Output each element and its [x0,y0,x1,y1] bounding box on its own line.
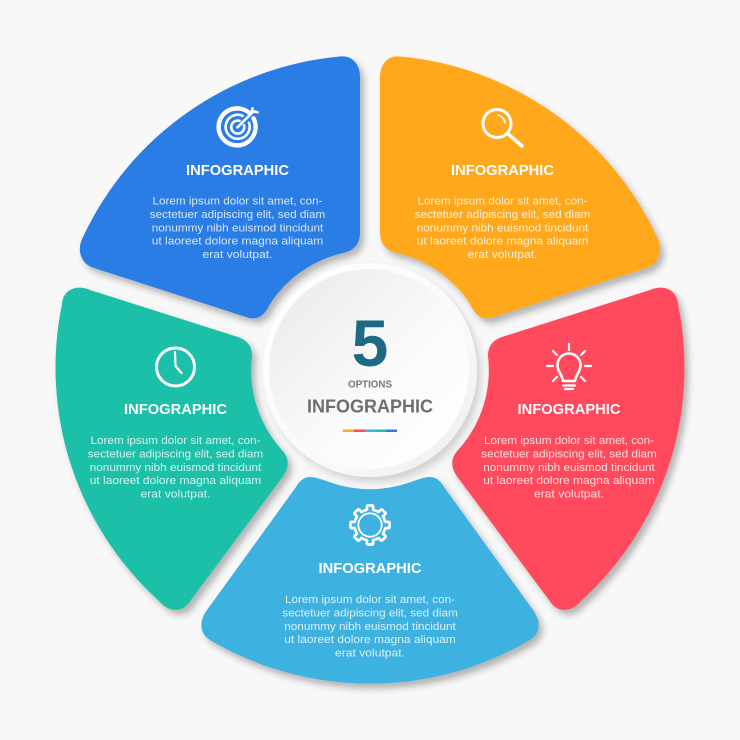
orange panel shape [380,56,660,318]
heading: INFOGRAPHIC [318,560,422,577]
panel: blue target [80,56,360,318]
body text: nonummy nibh euismod tincidunt [90,462,261,474]
body text: Lorem ipsum dolor sit amet, con- [152,196,323,208]
body text: ut laoreet dolore magna aliquam [284,634,456,646]
outer ring [263,263,477,477]
body text [150,196,325,261]
body text: nonummy nibh euismod tincidunt [152,222,323,234]
body text: nonummy nibh euismod tincidunt [483,462,655,474]
center circle [263,263,477,477]
center heading: INFOGRAPHIC [307,397,433,417]
red panel shape [452,288,684,610]
body text: nonummy nibh euismod tincidunt [284,621,456,633]
panel: orange magnifier [380,56,660,318]
color bar [343,430,397,432]
body text: Lorem ipsum dolor sit amet, con- [418,196,588,208]
body text: ut laoreet dolore magna aliquam [417,236,588,248]
body text [88,435,263,500]
body text: ut laoreet dolore magna aliquam [90,475,261,487]
body text: erat volutpat. [534,488,604,500]
body text: ut laoreet dolore magna aliquam [152,236,323,248]
heading: INFOGRAPHIC [186,162,289,179]
body text [415,196,590,261]
icon: clock [156,348,194,386]
body text: erat volutpat. [468,249,538,261]
body text [282,594,458,660]
body text: Lorem ipsum dolor sit amet, con- [484,435,654,447]
heading: INFOGRAPHIC [518,401,621,418]
body text: sectetuer adipiscing elit, sed diam [88,448,263,460]
panel: red lightbulb [452,288,684,610]
body text: erat volutpat. [140,488,210,500]
body text: Lorem ipsum dolor sit amet, con- [90,435,261,447]
body text: sectetuer adipiscing elit, sed diam [481,448,657,460]
icon: lightbulb [547,344,591,389]
blue panel shape [80,56,360,318]
body text: nonummy nibh euismod tincidunt [417,222,588,234]
options label: OPTIONS [348,378,392,390]
number 5: 5 [352,306,388,380]
heading: INFOGRAPHIC [124,401,227,418]
body text: erat volutpat. [335,648,405,660]
panel: green clock [56,288,288,610]
body text: erat volutpat. [202,249,272,261]
body text: sectetuer adipiscing elit, sed diam [282,608,458,620]
icon: target [219,108,258,145]
icon: magnifier [483,110,522,146]
icon: gear [350,506,390,544]
body text: sectetuer adipiscing elit, sed diam [415,209,590,221]
green panel shape [56,288,288,610]
body text: ut laoreet dolore magna aliquam [483,475,655,487]
light blue panel shape [201,477,539,684]
body text: Lorem ipsum dolor sit amet, con- [285,594,455,606]
heading: INFOGRAPHIC [451,162,554,179]
inner disc [269,269,469,469]
body text [481,435,657,500]
body text: sectetuer adipiscing elit, sed diam [150,209,325,221]
panel: light blue gear [201,477,539,684]
